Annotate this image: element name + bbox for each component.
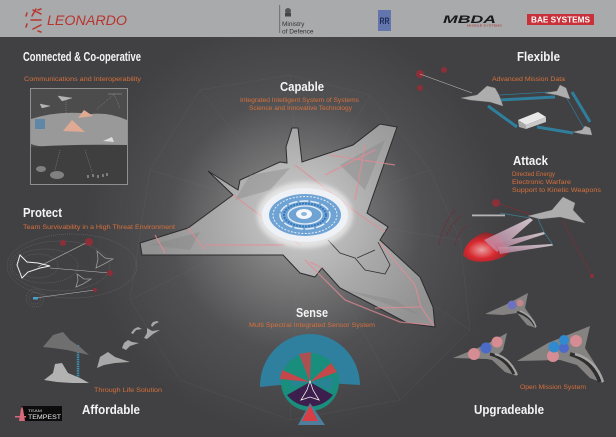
ghost jet [43,332,89,355]
maintenance link [77,345,79,378]
panel: flexible [416,49,592,135]
jet right [517,326,603,383]
heading: Flexible [517,49,560,64]
sensor coverage chart [260,334,360,425]
data box [518,112,546,129]
capability list: Electronic Warfare [512,179,571,186]
panel: sense [249,305,375,425]
logo: MBDA: MBDA [443,14,496,26]
sensor disc [257,182,353,248]
heading: Connected & Co-operative [23,49,141,64]
energy beams [484,218,553,254]
logo: Ministry of Defence: Ministry [282,21,305,28]
jet left [453,333,517,376]
panel: affordable [15,321,162,421]
background sensor network lines [130,75,470,420]
main aircraft [140,124,435,327]
pink structural lines [155,145,434,326]
logo: Ministry of Defence [280,5,314,36]
logo: Leonardo [26,9,127,32]
threat markers [416,67,472,93]
logo: Rolls-Royce [378,10,391,31]
jet [44,363,89,383]
panel: protect [7,205,175,307]
heading: Attack [513,153,549,168]
subheading: Advanced Mission Data [492,76,565,83]
logo: MBDA: MISSILE SYSTEMS [467,24,503,28]
logo: MBDA [443,14,503,28]
header band [0,0,616,37]
subheading: Multi Spectral Integrated Sensor System [249,322,375,329]
logo: BAE Systems: BAE SYSTEMS [531,16,591,24]
heading: Sense [296,305,328,320]
formation [97,321,160,368]
panel: upgradeable [453,293,603,417]
blast [463,232,510,262]
subheading: Team Survivability in a High Threat Environment [23,224,175,231]
protected jet [17,255,50,278]
jet top [485,293,536,328]
heading: Protect [23,205,63,220]
jet wing 1 [545,85,570,99]
jet lead [461,86,503,106]
heading: Upgradeable [474,402,544,417]
logo: Team Tempest: TEMPEST [28,415,61,421]
logo: Leonardo: LEONARDO [47,12,127,28]
escort outlines [76,251,113,287]
red shock arcs [439,210,468,245]
target lines [492,199,594,278]
threat lines [35,242,110,298]
heading: Capable [280,79,324,94]
logo: Ministry of Defence: of Defence [282,28,314,36]
subheading line 1: Integrated Intelligent System of Systems [240,97,360,104]
missile [472,214,505,216]
logo: Rolls-Royce: RR [380,16,390,26]
subheading line 2: Science and Innovative Technology [249,105,353,112]
capability list: Directed Energy [512,171,556,178]
heading: Affordable [82,402,140,417]
beam emitters [500,213,553,245]
threat markers [33,238,113,300]
canopy [328,240,390,274]
subheading: Communications and Interoperability [24,76,142,83]
logo: Team Tempest: TEAM [28,409,42,413]
sensor aircraft [301,381,319,400]
capability list: Support to Kinetic Weapons [512,187,602,194]
panel: capable [240,79,360,112]
range rings [7,234,137,307]
panel: connected and co-operative [23,49,142,184]
capability list [512,171,602,194]
panel: attack [439,153,602,278]
through life label: Through Life Solution [94,387,162,394]
jet wing 2 [573,126,592,135]
jet [528,197,585,223]
illustration [30,88,128,184]
logo: Team Tempest [15,406,62,421]
data links [488,92,590,133]
label: Open Mission System [520,384,586,391]
